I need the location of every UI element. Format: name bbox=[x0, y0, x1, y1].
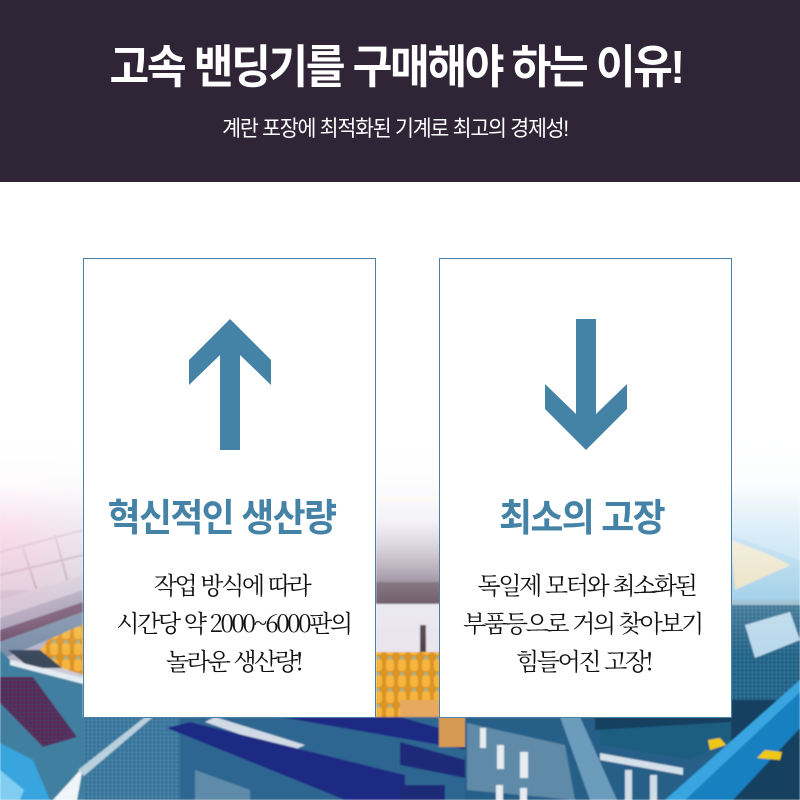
left: mesh floor bbox=[83, 717, 183, 800]
bottom right: rollers and beam bbox=[465, 717, 800, 800]
title: 고속 밴딩기를 구매해야 하는 이유! bbox=[110, 41, 682, 93]
text block: breakdown: 힘들어진 고장! bbox=[516, 642, 651, 677]
icon: down arrow bbox=[545, 319, 627, 450]
text block: output bbox=[116, 566, 351, 677]
background: factory conveyor photo fading to white bbox=[0, 489, 800, 800]
middle column: machine and bottles bbox=[376, 497, 440, 500]
text block: output: 시간당 약 2000~6000판의 bbox=[116, 604, 351, 639]
right: light machinery bbox=[731, 535, 800, 610]
left: lower structure bbox=[0, 650, 83, 800]
subtitle: 계란 포장에 최적화된 기계로 최고의 경제성! bbox=[222, 116, 568, 141]
text block: output: 작업 방식에 따라 bbox=[154, 566, 309, 601]
header band bbox=[0, 0, 800, 182]
right: blue diagonal beam bbox=[665, 680, 800, 800]
icon: up arrow bbox=[189, 319, 271, 450]
panel: breakdown bbox=[439, 258, 732, 718]
left: orange bottles bbox=[40, 624, 83, 675]
panel: output bbox=[83, 258, 376, 718]
left: window panels and frame bbox=[0, 530, 83, 600]
middle bottom: conveyor and navy beams bbox=[180, 717, 470, 800]
heading: output: 혁신적인 생산량 bbox=[108, 498, 335, 540]
text block: breakdown bbox=[463, 566, 702, 677]
text block: breakdown: 독일제 모터와 최소화된 bbox=[478, 566, 695, 601]
text block: breakdown: 부품등으로 거의 찾아보기 bbox=[463, 604, 702, 639]
text block: output: 놀라운 생산량! bbox=[166, 642, 301, 677]
base tone bbox=[0, 440, 83, 800]
heading: breakdown: 최소의 고장 bbox=[499, 498, 664, 540]
